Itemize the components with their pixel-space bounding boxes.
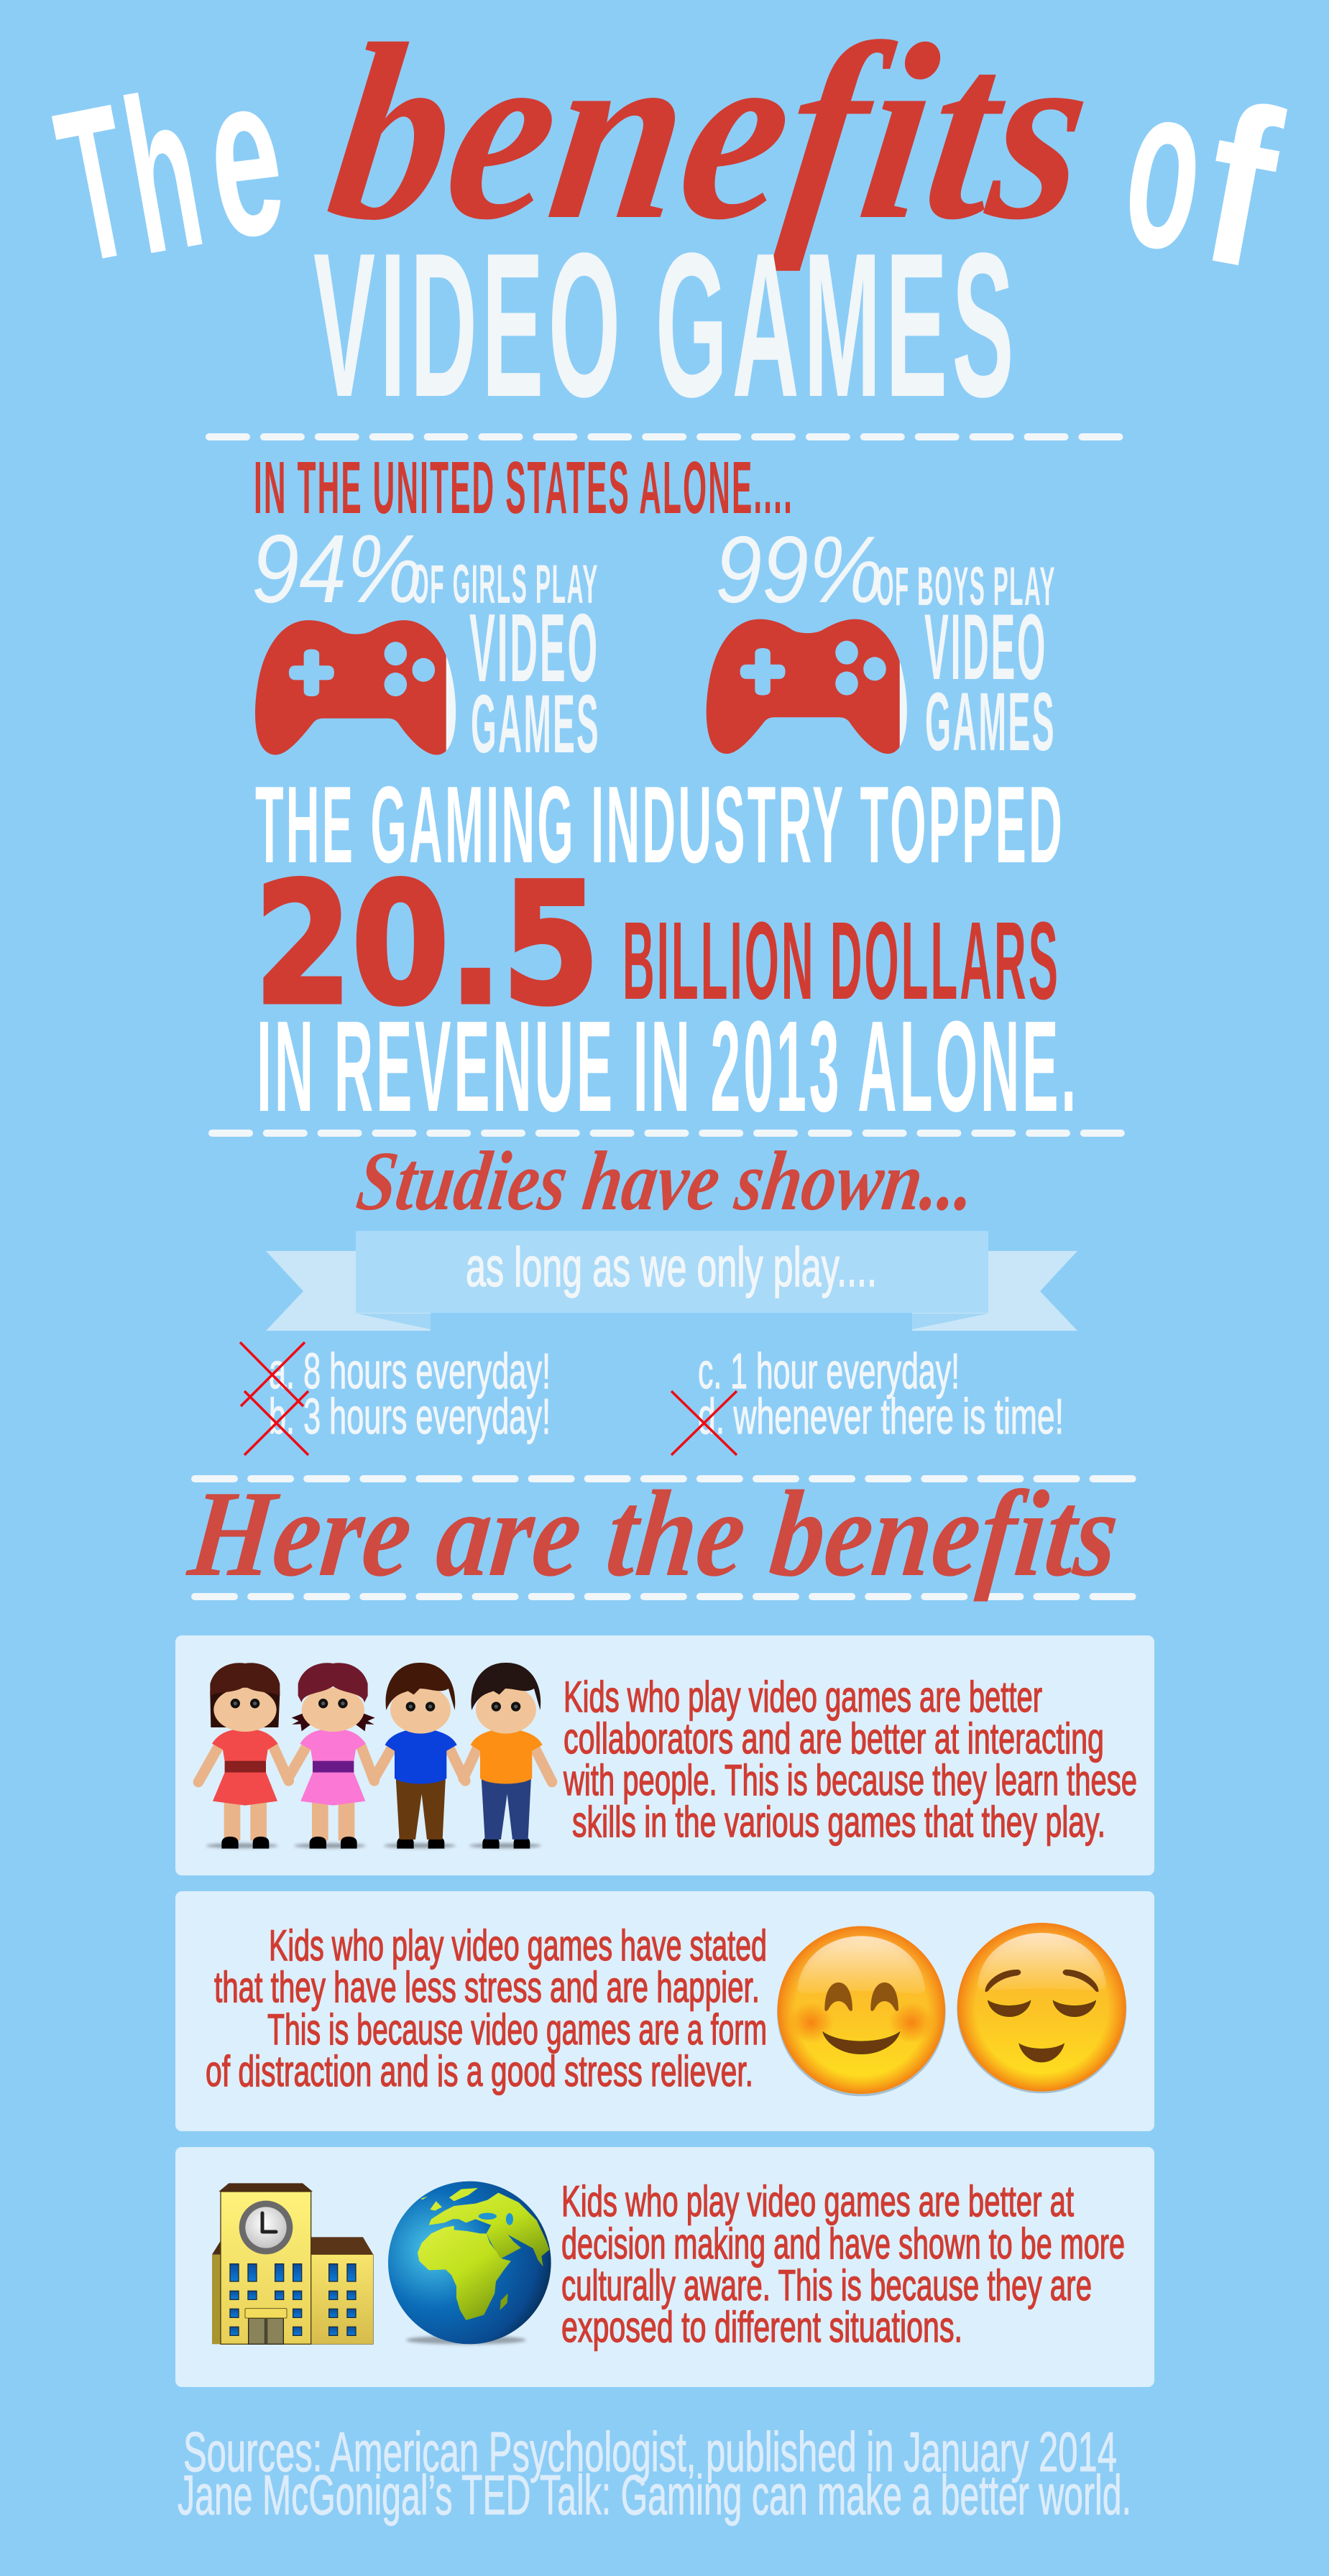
icon: game controller [707, 619, 907, 754]
cross a [240, 1342, 305, 1406]
icon: relieved face [957, 1923, 1126, 2093]
icon: four people holding hands [198, 1663, 552, 1849]
stress text: Kids who play video games have stated [269, 1921, 767, 1970]
title: of: f [1186, 55, 1304, 318]
title: The: T [42, 57, 155, 309]
boy blue [374, 1663, 465, 1849]
text: VIDEO [924, 594, 1047, 699]
cross b [244, 1391, 308, 1455]
stat: girls [252, 514, 600, 770]
text: OF GIRLS PLAY [411, 554, 599, 615]
option a: a. 8 hours everyday! [269, 1343, 551, 1399]
girl red [198, 1663, 289, 1849]
banner [266, 1231, 1077, 1331]
sources [178, 2420, 1131, 2526]
panel: collaboration [175, 1635, 1154, 1875]
stat: boys [707, 517, 1056, 768]
stress text: that they have less stress and are happier. [214, 1963, 760, 2011]
decisions text: culturally aware. This is because they are [561, 2261, 1092, 2309]
revenue: 20.5: 20.5 [254, 849, 599, 1041]
heading: studies have shown: Studies have shown... [351, 1134, 981, 1228]
text: VIDEO [469, 594, 599, 702]
decisions text [561, 2177, 1125, 2351]
panel: stress [175, 1891, 1154, 2131]
boy orange [464, 1663, 552, 1849]
girl pink [288, 1663, 375, 1849]
icon: globe [388, 2182, 551, 2345]
title: The [42, 22, 302, 309]
stress text [206, 1921, 767, 2095]
option d: d. whenever there is time! [698, 1388, 1064, 1444]
decisions text: Kids who play video games are better at [561, 2177, 1074, 2225]
icon: school building [212, 2183, 373, 2344]
title: benefits: benefits [316, 0, 1106, 272]
text: GAMES [925, 676, 1056, 768]
banner text: as long as we only play.... [466, 1237, 877, 1298]
panel: decisions [175, 2147, 1154, 2387]
option b: b. 3 hours everyday! [269, 1388, 551, 1444]
heading: here are the benefits: Here are the benefits [182, 1465, 1125, 1602]
stress text: This is because video games are a form [267, 2005, 767, 2054]
collaboration text: Kids who play video games are better [564, 1673, 1042, 1721]
title: The: e [195, 22, 302, 287]
option c: c. 1 hour everyday! [698, 1343, 960, 1399]
title: of [1111, 33, 1304, 318]
collaboration text [563, 1673, 1137, 1846]
text: GAMES [471, 678, 600, 770]
99 percent: 99% [715, 517, 883, 622]
icon: smiling face [777, 1926, 946, 2096]
decisions text: exposed to different situations. [561, 2303, 962, 2351]
94 percent: 94% [252, 514, 423, 623]
stress text: of distraction and is a good stress reliever. [206, 2047, 753, 2095]
text: OF BOYS PLAY [876, 556, 1056, 617]
collaboration text: collaborators and are better at interacting [564, 1714, 1104, 1763]
icon: game controller [255, 620, 456, 755]
title: The: h [109, 45, 223, 301]
title: of: o [1111, 33, 1225, 302]
cross d [671, 1391, 737, 1455]
